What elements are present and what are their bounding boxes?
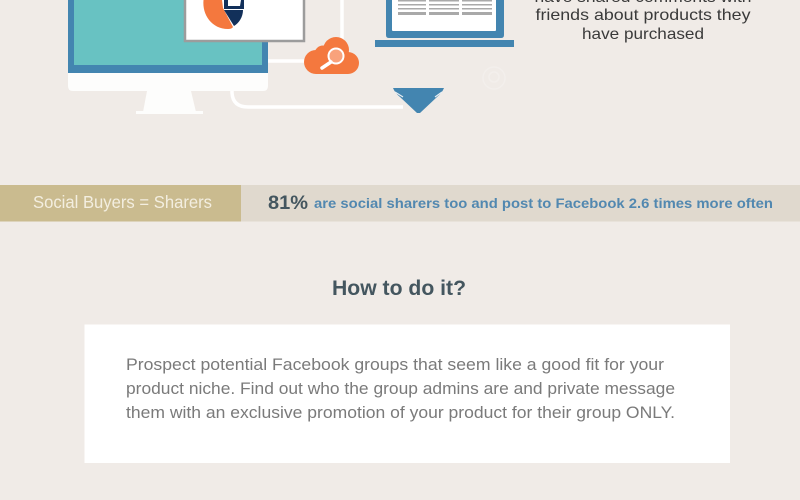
card body text [126, 356, 675, 422]
panel: how to do it card [84, 324, 730, 463]
text block: shared comments statistic: friends about products they [536, 7, 750, 24]
card body text: Prospect potential Facebook groups that seem like a good fit for your [126, 356, 665, 374]
statistic 81%: 81% [268, 193, 308, 214]
text block: shared comments statistic: have purchased [582, 26, 704, 43]
heading: How to do it? [332, 277, 466, 300]
connector lines [232, 0, 403, 107]
icon: cloud with magnifier [304, 37, 359, 74]
icon: pie chart [203, 0, 244, 29]
laptop screen text lines [398, 0, 492, 15]
panel: social buyers band [0, 185, 800, 222]
icon: blue down arrow [393, 88, 444, 113]
icon: desktop monitor [68, 0, 268, 114]
icon: laptop [375, 0, 514, 47]
icon: faint magnifier circle [483, 67, 505, 89]
panel: pie chart window [185, 0, 304, 41]
card body text: product niche. Find out who the group admins are and private message [126, 380, 675, 398]
band label: Social Buyers = Sharers [33, 192, 212, 212]
text block: shared comments statistic [534, 0, 752, 43]
statistic description: are social sharers too and post to Facebook 2.6 times more often [314, 196, 773, 211]
card body text: them with an exclusive promotion of your product for their group ONLY. [126, 404, 675, 422]
